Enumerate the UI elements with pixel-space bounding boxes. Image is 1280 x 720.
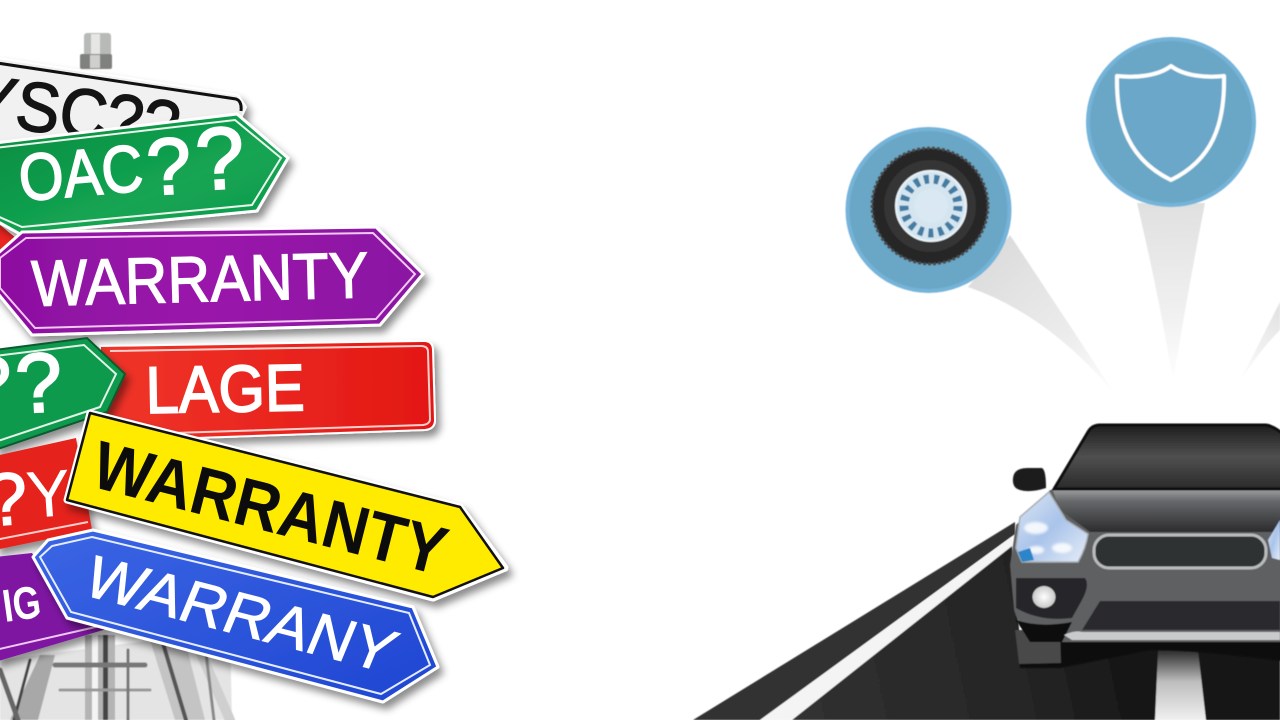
sign: green question marks: ? [13, 335, 65, 431]
lower bumper black [1016, 620, 1072, 642]
right headlight [1268, 520, 1280, 560]
chrome strip [1064, 631, 1280, 640]
road centre dash [1155, 650, 1206, 720]
sign: green OAC [0, 108, 288, 234]
left fog lamp housing [1016, 578, 1087, 619]
headlight reflections [1024, 522, 1072, 554]
sign: blue WARRANY [33, 530, 438, 702]
side mirror [1013, 468, 1046, 491]
sign: purple lower: IG [0, 575, 44, 632]
pointer cone: shield [1137, 203, 1205, 382]
grille [1094, 535, 1266, 568]
windshield [1054, 425, 1280, 489]
sign: yellow WARRANTY: WARRANTY [85, 427, 455, 590]
sign: green OAC: ? [144, 121, 193, 212]
road side line [760, 537, 1012, 720]
pointer cone: tire [968, 235, 1117, 397]
tire [872, 148, 988, 264]
headlight blue accent [1018, 548, 1034, 562]
signpost pole top [80, 33, 112, 69]
fog lamp [1032, 586, 1056, 608]
sign: purple lower [0, 553, 110, 662]
car underside shadow [1018, 640, 1280, 668]
pointer cone: right [1238, 302, 1280, 385]
sign: purple WARRANTY [0, 227, 423, 335]
sign: red LAGE [100, 341, 435, 441]
car [1010, 425, 1280, 668]
sign: blue WARRANY: WARRANY [75, 543, 407, 685]
signpost [0, 33, 505, 720]
car wheel [1015, 630, 1061, 664]
left headlight [1016, 492, 1088, 562]
icon: tire badge [848, 129, 1010, 291]
car hood [1052, 488, 1280, 532]
signpost legs [0, 630, 232, 720]
road edge strip [693, 522, 1015, 720]
road [693, 522, 1280, 720]
icon: shield badge [1088, 39, 1254, 205]
wheel rim [896, 171, 966, 241]
sign: red back tip [0, 225, 16, 252]
sign: red question marks [0, 438, 92, 550]
sign: green OAC: OAC [16, 130, 146, 215]
sign: red question marks: Y [24, 455, 73, 532]
sign: purple WARRANTY: WARRANTY [30, 238, 369, 320]
sign: red LAGE: LAGE [145, 350, 305, 427]
road surface [792, 546, 1280, 720]
car body [1010, 490, 1280, 642]
sign: green question marks [0, 335, 125, 450]
sign: green OAC: ? [193, 108, 247, 209]
lower grille [1082, 601, 1280, 630]
